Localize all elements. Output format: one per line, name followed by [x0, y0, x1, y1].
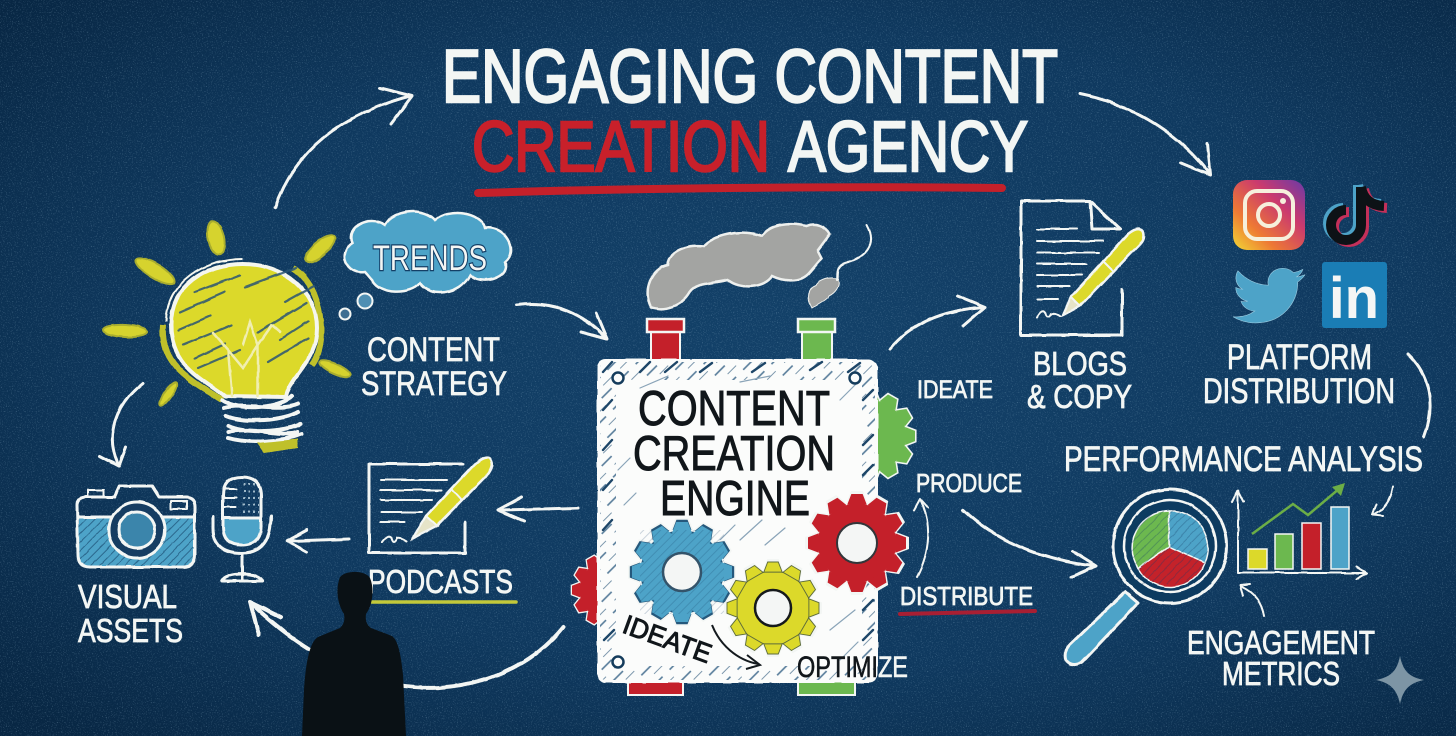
label: ideate inside engine: IDEATE — [619, 609, 716, 669]
label: blogs and copy — [1027, 345, 1132, 415]
arrow: engine to blogs — [890, 296, 985, 349]
light rays — [103, 220, 353, 408]
silhouette: person — [302, 572, 406, 736]
icon: magnifier with pie chart — [1065, 489, 1227, 665]
label: visual assets — [78, 578, 183, 649]
bulb hatching — [178, 268, 314, 368]
gear: left red — [572, 553, 646, 627]
cloud: trends — [340, 212, 511, 320]
title: AGENCY — [788, 108, 1028, 187]
engine feet — [628, 680, 855, 695]
label: platform distribution: DISTRIBUTION — [1203, 372, 1395, 411]
icon: sparkle watermark — [1376, 656, 1424, 704]
arrow: bulb to camera — [100, 383, 143, 466]
panel: content creation engine — [597, 359, 909, 684]
gear: red — [805, 491, 909, 595]
icon: microphone — [213, 477, 271, 581]
title underline — [478, 187, 1002, 193]
label: optimize: OPTIMIZE — [797, 651, 908, 684]
bars — [1248, 507, 1349, 569]
gear: yellow — [724, 559, 822, 657]
label: ideate: IDEATE — [917, 376, 993, 404]
axes — [1232, 490, 1367, 579]
engine title — [633, 382, 835, 526]
trend line — [1252, 488, 1340, 534]
gear: green — [825, 391, 915, 481]
engine title: ENGINE — [660, 472, 810, 526]
icon: camera — [77, 486, 195, 567]
arrow: platform to performance — [1408, 354, 1430, 437]
smoke: right chimney — [809, 225, 871, 308]
label: blogs and copy: BLOGS — [1033, 345, 1127, 382]
arrow: distribute to produce — [914, 499, 928, 577]
cloud: trends: TRENDS — [373, 239, 487, 278]
bar chart — [1232, 483, 1367, 579]
engine title: CREATION — [633, 427, 835, 481]
label: engagement metrics — [1187, 624, 1375, 692]
bulb tip — [257, 439, 298, 453]
arrow: produce to analysis — [963, 510, 1096, 577]
label: visual assets: VISUAL — [78, 578, 177, 615]
engine dark strokes — [603, 362, 873, 640]
arrow: engine to microphone — [250, 602, 563, 688]
title: CREATION — [472, 108, 770, 187]
smoke: left chimney — [648, 224, 830, 309]
arrow: engine to podcasts — [498, 497, 578, 521]
icon: document with pen, podcasts — [369, 458, 492, 553]
label: content strategy — [361, 331, 507, 403]
label: produce: PRODUCE — [916, 468, 1022, 498]
arrow: ideate to optimize — [712, 625, 760, 669]
label: distribute: DISTRIBUTE — [900, 581, 1033, 611]
label: blogs and copy: & COPY — [1027, 378, 1132, 415]
filament — [213, 322, 280, 396]
icon: tiktok — [1328, 185, 1387, 242]
arrow: podcasts to microphone — [287, 530, 349, 552]
chimney: green — [798, 319, 835, 360]
arrow: trends to engine — [517, 304, 607, 339]
podcasts underline — [372, 600, 516, 604]
arrow: analysis to chart — [1372, 487, 1393, 516]
chimney: red — [647, 319, 684, 360]
title: ENGAGING CONTENT — [442, 34, 1058, 118]
label: content strategy: STRATEGY — [361, 365, 507, 403]
distribute underline — [900, 611, 1035, 614]
label: platform distribution — [1203, 338, 1395, 411]
arrow: title to platforms — [1080, 94, 1210, 175]
icon: instagram — [1233, 180, 1305, 250]
arrow: strategy up to title — [275, 88, 412, 208]
label: visual assets: ASSETS — [78, 612, 183, 649]
engine title: CONTENT — [638, 382, 830, 436]
bulb glow rim — [163, 268, 321, 400]
label: engagement metrics: ENGAGEMENT — [1187, 624, 1375, 661]
icon: twitter — [1233, 268, 1305, 323]
icon: lightbulb — [103, 220, 353, 453]
label: engagement metrics: METRICS — [1222, 655, 1340, 692]
gear: blue — [629, 519, 735, 625]
engine inner hatching — [618, 376, 858, 660]
bulb glass — [171, 264, 317, 397]
label: podcasts: PODCASTS — [368, 563, 513, 600]
screw base — [222, 396, 302, 441]
arrow: engagement to chart — [1240, 584, 1264, 616]
bolts — [612, 372, 860, 668]
title — [442, 34, 1058, 187]
label: content strategy: CONTENT — [367, 331, 500, 369]
label: platform distribution: PLATFORM — [1227, 338, 1372, 377]
pie slices — [1169, 511, 1208, 563]
icon: linkedin: in — [1329, 266, 1379, 331]
engine hatching — [600, 362, 875, 680]
icon: document with pen, blogs — [1021, 201, 1144, 335]
